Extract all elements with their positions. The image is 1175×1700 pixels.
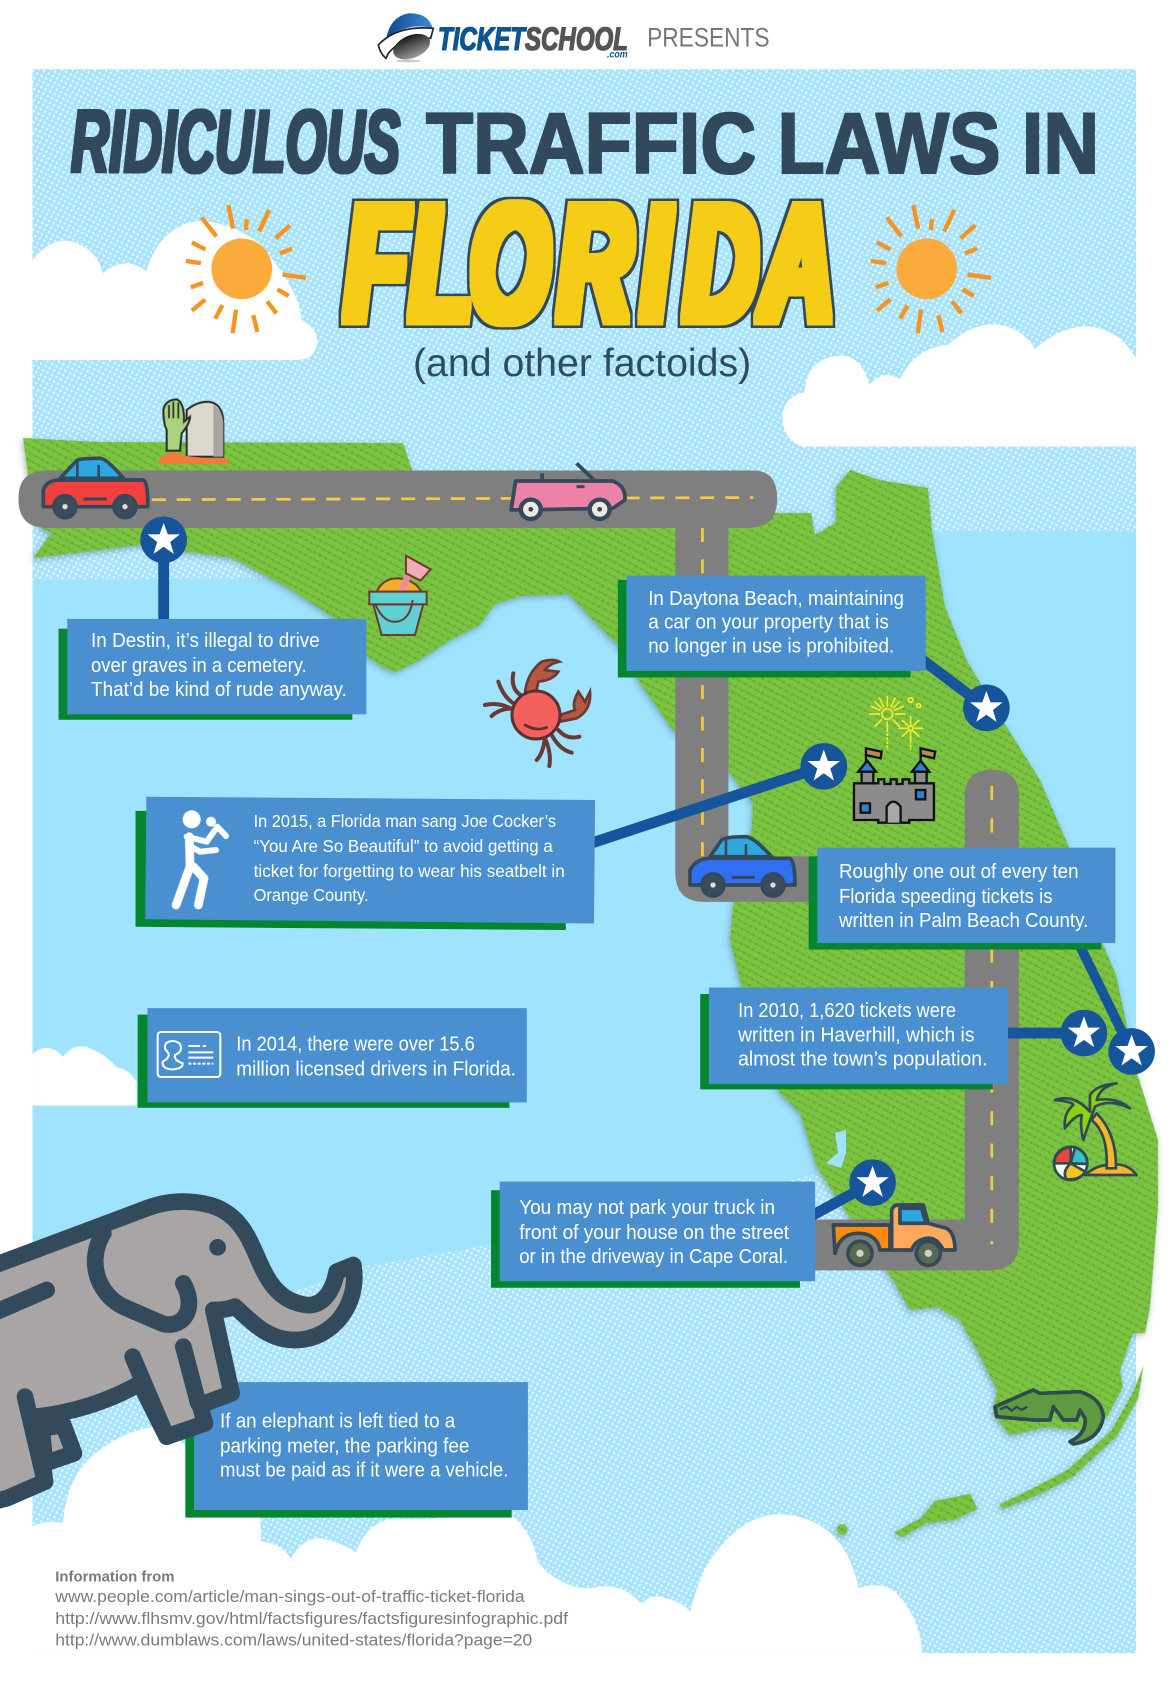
- callout: Daytona Beach: no longer in use is prohibited.: [648, 636, 894, 658]
- pin: Haverhill: [1061, 1010, 1107, 1056]
- connector: Palm Beach pin: [1079, 943, 1132, 1051]
- callout: licensed drivers: million licensed drivers in Florida.: [236, 1058, 516, 1080]
- callout: Palm Beach: Florida speeding tickets is: [839, 886, 1053, 908]
- icon: driver licence: [158, 1032, 220, 1077]
- callout: Destin: over graves in a cemetery.: [91, 655, 307, 677]
- callout: Cape Coral: You may not park your truck in: [519, 1197, 775, 1219]
- sources: [54, 1569, 568, 1649]
- callout shadow: elephant: [185, 1393, 512, 1518]
- connector: Orange County pin: [591, 766, 824, 843]
- cloud: middle left: [33, 1046, 137, 1106]
- header: presents: PRESENTS: [647, 22, 770, 53]
- callout: Cape Coral: front of your house on the street: [519, 1222, 790, 1244]
- icon: left sun: [186, 205, 306, 333]
- callout shadow: Destin: [59, 629, 352, 720]
- map: Florida land: [23, 438, 1158, 1537]
- callout: elephant: If an elephant is left tied to a: [220, 1411, 456, 1433]
- callout: Destin: In Destin, it’s illegal to drive: [91, 630, 320, 652]
- callout: Destin: That’d be kind of rude anyway.: [91, 679, 347, 701]
- callout: Orange County: In 2015, a Florida man sang Joe Cocker’s: [254, 811, 556, 831]
- icon: zombie hand and gravestone: [158, 399, 228, 464]
- callout: Haverhill: [709, 988, 1008, 1084]
- callout: Haverhill: almost the town’s population.: [738, 1049, 987, 1071]
- pin: Palm Beach: [1108, 1028, 1155, 1075]
- callout: Haverhill: written in Haverhill, which is: [737, 1025, 974, 1047]
- callout: Palm Beach: [817, 848, 1115, 943]
- callout: licensed drivers: In 2014, there were over 15.6: [236, 1033, 475, 1055]
- callout: Cape Coral: or in the driveway in Cape Coral.: [519, 1246, 788, 1268]
- callout shadow: Palm Beach: [809, 856, 1101, 950]
- icon: right sun: [871, 205, 991, 333]
- callout: Palm Beach: written in Palm Beach County.: [838, 910, 1088, 932]
- callout shadow: Haverhill: [700, 994, 993, 1089]
- callout: Orange County: Orange County.: [254, 885, 369, 905]
- icon: alligator: [995, 1390, 1103, 1444]
- connector: Daytona pin: [921, 659, 986, 708]
- cloud: top left: [33, 221, 317, 360]
- callout shadow: Cape Coral: [491, 1190, 800, 1288]
- icon: crab: [485, 660, 590, 766]
- callout: elephant: [194, 1382, 528, 1510]
- road: south: [802, 770, 1019, 1270]
- header wordmark: TICKETSCHOOL: [438, 21, 628, 57]
- map: bay inlet: [826, 1130, 846, 1168]
- callout shadow: Orange County: [135, 811, 566, 930]
- callout: Cape Coral: [500, 1182, 815, 1281]
- title: traffic laws in: TRAFFIC LAWS IN: [426, 96, 1099, 192]
- cloud: top right: [782, 324, 1136, 447]
- callout: Palm Beach: Roughly one out of every ten: [839, 861, 1079, 883]
- callout: elephant: must be paid as if it were a vehicle.: [220, 1459, 508, 1481]
- icon: pink convertible: [511, 463, 625, 519]
- cloud: bottom: [33, 1427, 922, 1653]
- icon: fireworks: [869, 696, 923, 750]
- callout: Daytona Beach: In Daytona Beach, maintaining: [648, 588, 904, 610]
- icon: man singing: [176, 810, 226, 905]
- callout: Daytona Beach: a car on your property that is: [648, 612, 889, 634]
- callout: elephant: parking meter, the parking fee: [220, 1436, 469, 1458]
- connector: Destin pin: [159, 540, 169, 623]
- pin: Destin: [140, 517, 187, 563]
- title: ridiculous: RIDICULOUS: [71, 91, 400, 191]
- icon: palm tree and beach ball: [1054, 1083, 1137, 1180]
- callout: Daytona Beach: [627, 576, 926, 671]
- sources: http://www.dumblaws.com/laws/united-states/florida?page=20: [55, 1630, 532, 1649]
- sources: http://www.flhsmv.gov/html/factsfigures/factsfiguresinfographic.pdf: [55, 1609, 568, 1628]
- illustration: elephant: [0, 1202, 354, 1503]
- pin: Daytona Beach: [963, 685, 1010, 731]
- sources: www.people.com/article/man-sings-out-of-traffic-ticket-florida: [54, 1587, 525, 1606]
- icon: bucket and spade: [369, 556, 431, 635]
- callout shadow: Daytona Beach: [618, 580, 911, 677]
- callout shadow: licensed drivers: [138, 1015, 509, 1108]
- icon: castle: [854, 748, 935, 823]
- callout: licensed drivers: [147, 1008, 527, 1102]
- pin: Orange County: [800, 743, 847, 790]
- callout: Orange County: ticket for forgetting to wear his seatbelt in: [254, 861, 565, 881]
- callout: Destin: [67, 619, 366, 714]
- icon: blue car: [690, 837, 795, 896]
- callout: Orange County: [145, 797, 595, 924]
- connector: Cape Coral pin: [811, 1183, 873, 1216]
- subtitle: (and other factoids): [413, 342, 751, 385]
- pin: Cape Coral: [849, 1159, 896, 1206]
- connector: Haverhill pin: [1003, 1028, 1084, 1038]
- icon: orange truck: [833, 1205, 955, 1265]
- header logo: [378, 13, 434, 64]
- road: north: [18, 470, 813, 902]
- header wordmark suffix: .com: [607, 49, 628, 60]
- callout: Orange County: “You Are So Beautiful” to avoid getting a: [254, 836, 553, 856]
- icon: red car: [43, 458, 148, 518]
- callout: Haverhill: In 2010, 1,620 tickets were: [738, 1000, 956, 1022]
- title: Florida: FLORIDA: [345, 172, 835, 356]
- sources: Information from: [55, 1569, 175, 1586]
